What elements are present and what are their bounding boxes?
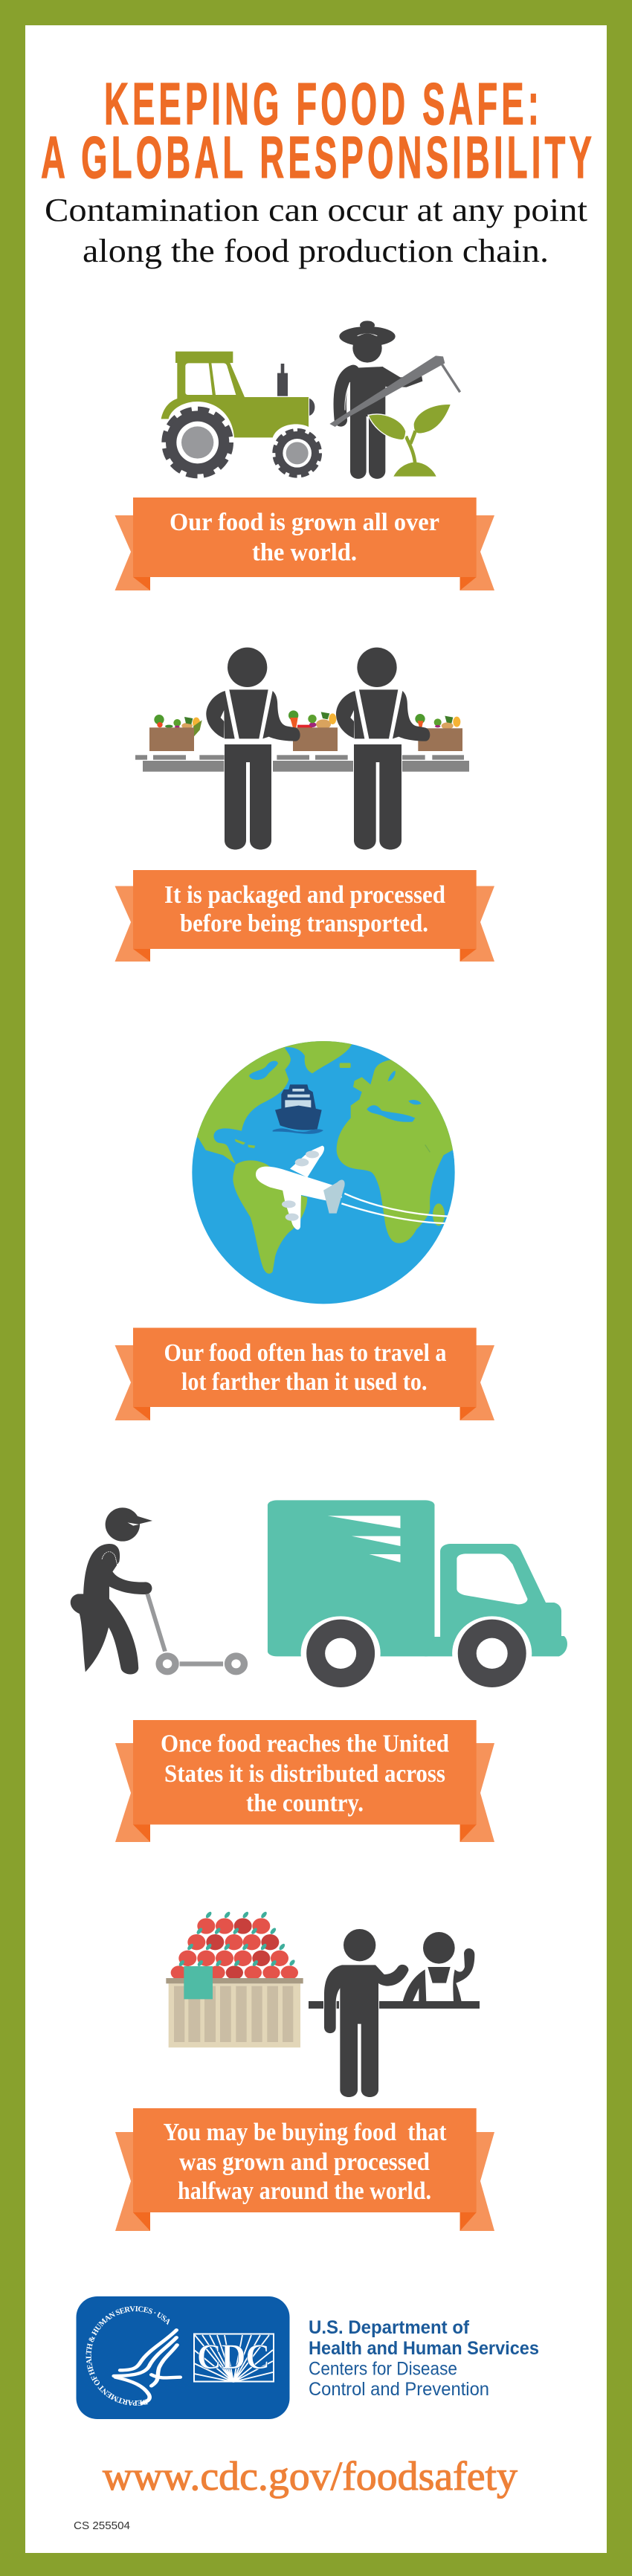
globe	[192, 1041, 455, 1304]
website url: www.cdc.gov/foodsafety	[103, 2453, 517, 2499]
banner: packaged	[115, 870, 494, 962]
CDC box: CDC	[197, 2337, 270, 2377]
banner: buying: halfway around the world.	[178, 2177, 431, 2205]
banner: distributed: States it is distributed across	[164, 1760, 445, 1788]
worker 1	[206, 648, 300, 849]
banner: distributed	[115, 1720, 494, 1842]
icon: apple crate	[166, 1910, 303, 2047]
icon: globe with ship and plane	[192, 1041, 455, 1304]
banner: travel: lot farther than it used to.	[181, 1368, 427, 1396]
subtitle: along the food production chain.	[83, 233, 549, 269]
icon: ship	[273, 1084, 323, 1134]
icon: plane	[256, 1146, 448, 1230]
banner: travel	[115, 1328, 494, 1420]
subtitle	[45, 192, 587, 269]
crate of vegetables 1	[149, 715, 202, 751]
banner: distributed: the country.	[246, 1789, 364, 1817]
crate of vegetables 3	[415, 714, 462, 751]
banner: buying	[115, 2108, 494, 2231]
icon: courier and delivery truck	[71, 1500, 567, 1690]
banner: grown: the world.	[252, 538, 357, 567]
conveyor belt	[135, 755, 469, 772]
icon: shopper	[324, 1929, 408, 2097]
icon: seedling	[368, 405, 451, 477]
icon: truck	[268, 1500, 567, 1690]
banner: buying: You may be buying food that	[164, 2119, 447, 2146]
organization names	[309, 2317, 539, 2400]
icon: workers at conveyor	[135, 648, 469, 849]
icon: courier with scooter	[71, 1507, 248, 1675]
banner: distributed: Once food reaches the United	[161, 1730, 449, 1758]
banner: packaged: before being transported.	[180, 910, 428, 937]
title	[41, 71, 596, 190]
crate of vegetables 2	[288, 710, 338, 751]
banner: packaged: It is packaged and processed	[164, 881, 445, 909]
organization names: Control and Prevention	[309, 2379, 489, 2400]
icon: vendor	[403, 1932, 474, 2002]
banner: buying: was grown and processed	[179, 2148, 430, 2176]
icon: farmer	[329, 321, 460, 479]
logo: HHS and CDC	[76, 2296, 539, 2419]
seal text: DEPARTMENT OF HEALTH & HUMAN SERVICES · USA	[86, 2306, 170, 2406]
organization names: Health and Human Services	[309, 2338, 539, 2359]
counter	[309, 2001, 480, 2009]
icon: tractor	[161, 352, 320, 476]
icon: tractor and farmer	[161, 321, 460, 479]
banner: grown: Our food is grown all over	[170, 509, 439, 536]
organization names: Centers for Disease	[309, 2359, 457, 2380]
banner: grown	[115, 498, 494, 590]
eagle mark	[114, 2330, 180, 2403]
banner: travel: Our food often has to travel a	[164, 1339, 446, 1367]
icon: market stall and shoppers	[166, 1910, 480, 2097]
organization names: U.S. Department of	[309, 2317, 470, 2338]
worker 2	[336, 648, 430, 849]
publication code: CS 255504	[74, 2519, 130, 2532]
subtitle: Contamination can occur at any point	[45, 192, 587, 228]
